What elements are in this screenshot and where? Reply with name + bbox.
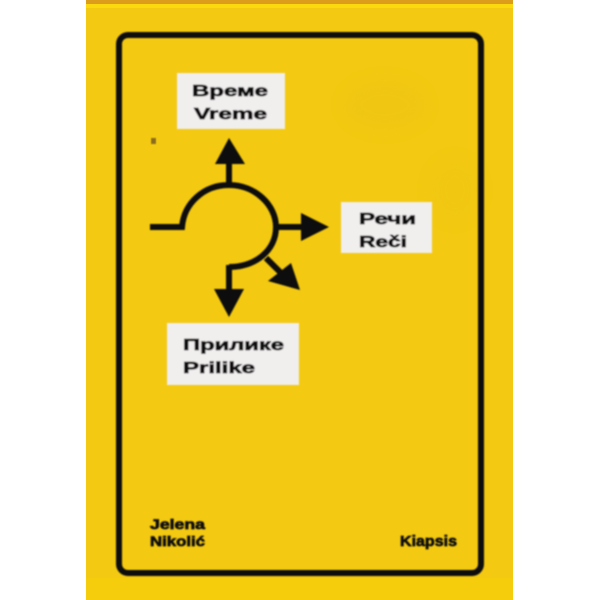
arrow: up to Vreme xyxy=(215,138,245,185)
label: Reči: Reči xyxy=(359,234,407,251)
label: Vreme: Vreme xyxy=(194,106,267,123)
roundabout ring with entry road xyxy=(150,185,276,267)
arrow: diagonal xyxy=(266,258,300,290)
publisher logo: Kiapsis xyxy=(400,533,457,550)
label: Prilike: Прилике xyxy=(183,337,284,354)
label: Vreme: Време xyxy=(192,83,268,100)
label: Reči: Речи xyxy=(359,211,416,228)
author name: Jelena xyxy=(150,516,205,532)
book cover background xyxy=(86,0,513,600)
roundabout arrow diagram xyxy=(150,138,329,317)
label: Prilike: Prilike xyxy=(183,360,255,377)
label: Reči xyxy=(341,202,432,253)
label: Vreme xyxy=(177,73,285,129)
road sign border frame xyxy=(119,35,481,573)
arrow: right to Reči xyxy=(276,213,329,241)
speck xyxy=(151,138,156,144)
arrow: down to Prilike xyxy=(214,265,244,317)
author name: Nikolić xyxy=(150,533,205,549)
label: Prilike xyxy=(167,323,299,385)
author name xyxy=(150,516,205,549)
